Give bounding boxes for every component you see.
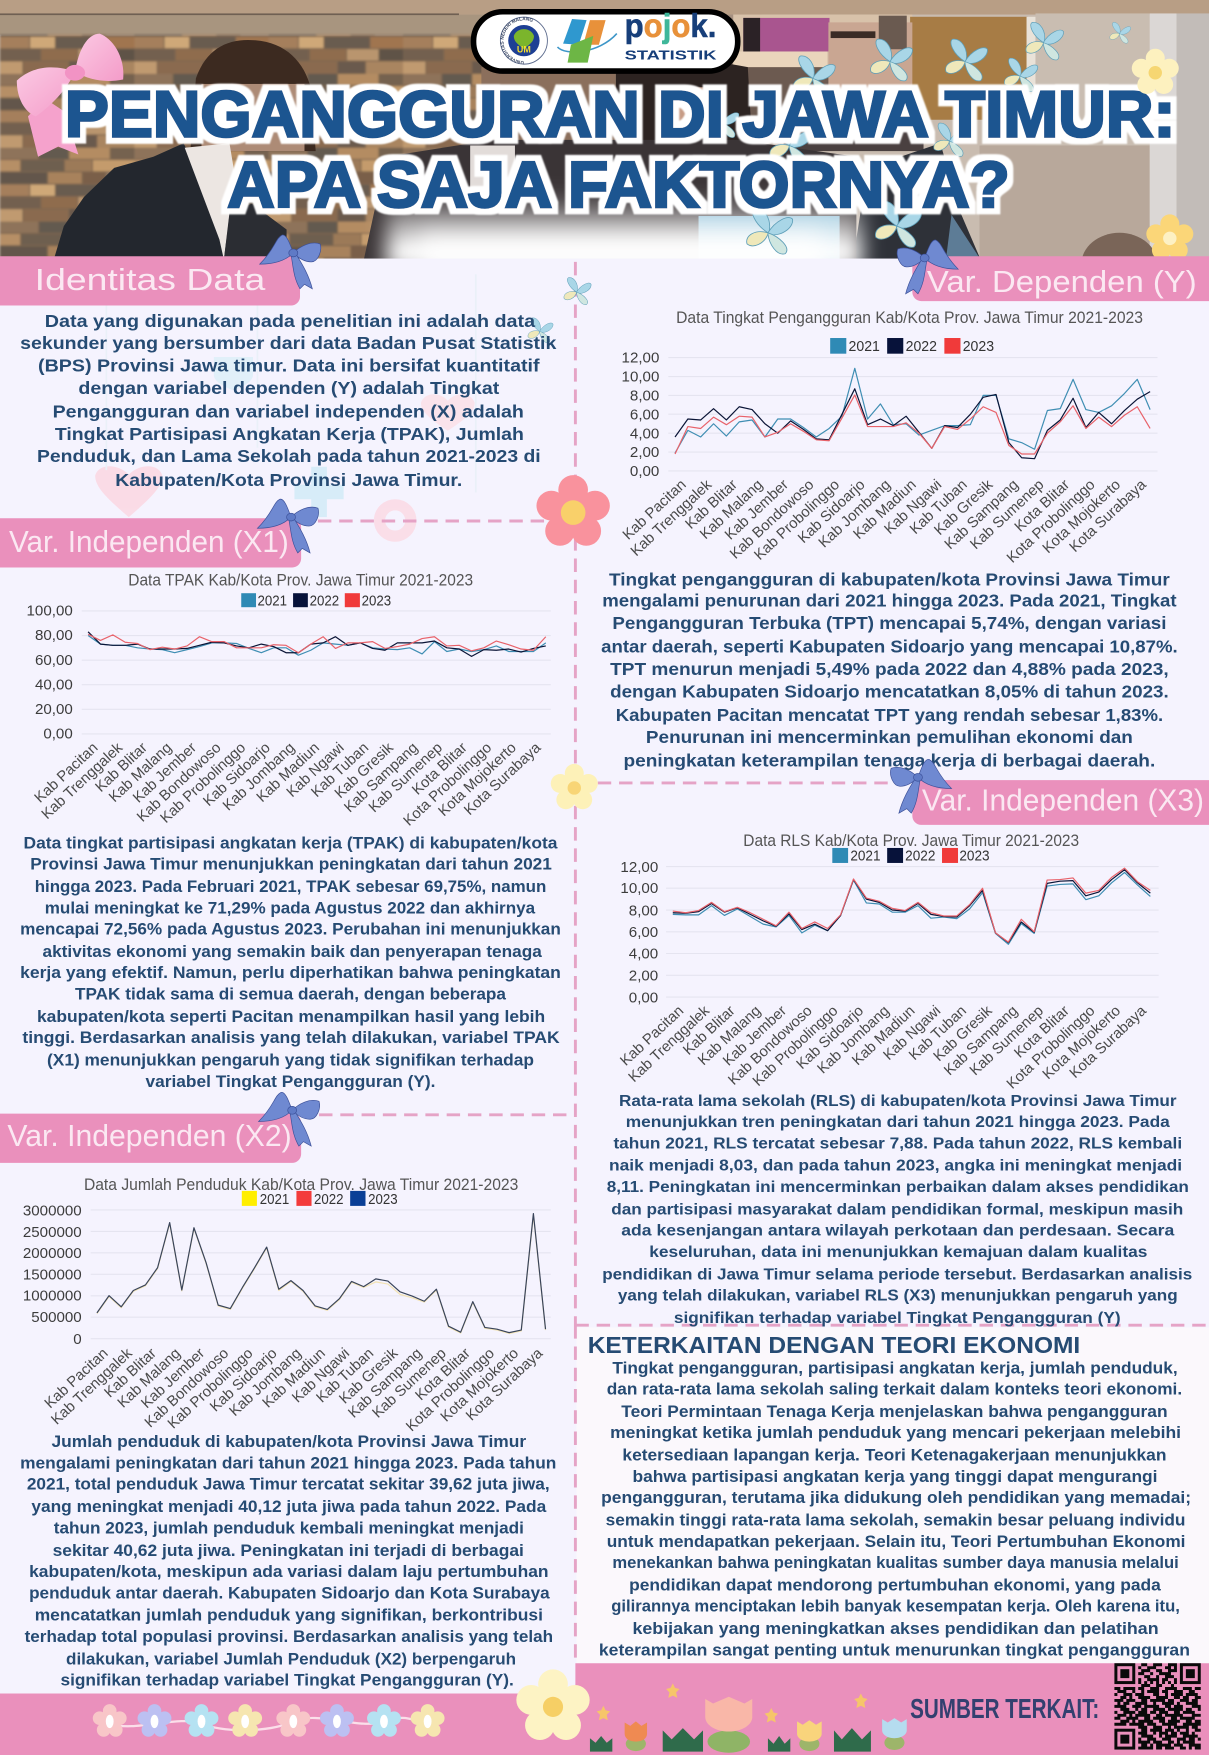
chart: jumlah penduduk: Kab Ngawi [289,1346,353,1406]
chart: TPAK: Kab Jombang [220,740,298,814]
heading: Identitas Data: Identitas Data [35,264,266,297]
icon: blue bow [257,499,319,553]
chart: RLS: 6,00 [629,924,658,941]
chart: jumlah penduduk: Kab Sampang [346,1346,425,1422]
text: pengangguran analysis: TPT menurun menjadi 5,49% pada 2022 dan 4,88% pada 2023, [610,659,1169,679]
legend: 2023 [368,1191,398,1208]
icon: cream flower bottom [516,1669,590,1740]
dashed dividers [318,262,1209,1663]
chart: TPAK: Kab Blitar [93,740,151,796]
text: penduduk analysis: tahun 2023, jumlah penduduk kembali meningkat menjadi [54,1519,524,1537]
panel: keterkaitan dengan teori ekonomi [588,1332,1191,1659]
chart: RLS: Kab Bondowoso [726,1003,816,1089]
chart: RLS: Data RLS Kab/Kota Prov. Jawa Timur 2021-2023 [743,831,1079,850]
chart: RLS: Kab Gresik [931,1003,996,1065]
text: RLS analysis [602,1093,1193,1327]
chart: tingkat pengangguran: 0,00 [630,463,659,480]
chart: jumlah penduduk: Data Jumlah Penduduk Kab/Kota Prov. Jawa Timur 2021-2023 [84,1175,518,1194]
title: PENGANGGURAN DI JAWA TIMUR: [65,78,1175,151]
chart: TPAK: Kab Sidoarjo [201,740,274,810]
chart: TPAK: 100,00 [27,603,73,620]
text: RLS analysis: Rata-rata lama sekolah (RLS) di kabupaten/kota Provinsi Jawa Timur [619,1093,1177,1110]
icon: blue bow [890,759,952,813]
chart: tingkat pengangguran: Kab Sidoarjo [795,477,869,547]
chart: jumlah penduduk: 1500000 [23,1266,82,1283]
chart: tingkat pengangguran: Kab Jombang [816,477,894,551]
chart: RLS: Kab Sampang [941,1003,1021,1079]
text: identitas data [20,311,557,490]
chart: tingkat pengangguran: Kab Probolinggo [752,477,843,564]
panel: Var. Independen X2 heading bar [0,1114,301,1163]
text: penduduk analysis: penduduk antar daerah. Kabupaten Sidoarjo dan Kota Surabaya [29,1584,551,1602]
chart: TPAK: Data TPAK Kab/Kota Prov. Jawa Timur 2021-2023 [128,570,473,589]
chart: TPAK [27,570,551,830]
icon: university seal: UM [517,45,531,55]
body text: Tingkat pengangguran, partisipasi angkatan kerja, jumlah penduduk, [612,1359,1178,1377]
text: TPAK analysis: tinggi. Berdasarkan analisis yang telah dilakukan, variabel TPAK [22,1029,560,1047]
text: RLS analysis: signifikan terhadap variabel Tingkat Pengangguran (Y) [674,1310,1121,1327]
text: penduduk analysis: sekitar 40,62 juta jiwa. Peningkatan ini terjadi di berbagai [53,1542,524,1560]
chart: jumlah penduduk: Kab Jember [139,1345,208,1412]
chart: RLS: Kab Madiun [849,1003,918,1069]
chart: RLS: Kab Sumenep [967,1003,1047,1079]
chart: tingkat pengangguran: Kota Blitar [1012,477,1073,535]
chart: tingkat pengangguran: Kab Pacitan [620,477,690,543]
chart: tingkat pengangguran: Kab Malang [697,477,766,543]
chart: TPAK: Kab Sumenep [366,740,446,816]
chart: RLS: Kota Surabaya [1067,1003,1150,1082]
chart: RLS: Kota Blitar [1012,1003,1073,1062]
chart: tingkat pengangguran: Kota Surabaya [1067,476,1150,556]
logo text: pojok statistik: STATISTIK [625,47,717,62]
legend: 2023 [362,593,391,610]
icon: cream flower [551,764,598,809]
suit right [853,143,981,260]
icon: pink bow [17,34,123,157]
text: TPAK analysis: Provinsi Jawa Timur menunjukkan peningkatan dari tahun 2021 [30,856,552,874]
chart: tingkat pengangguran: 2,00 [630,444,659,461]
chart: jumlah penduduk: Kab Malang [115,1346,184,1411]
title [65,78,1175,221]
chart: RLS: Kab Jombang [815,1003,893,1077]
heading: KETERKAITAN DENGAN TEORI EKONOMI [588,1332,1080,1358]
body text: kebijakan yang meningkatkan akses pendidikan dan pelatihan [632,1620,1159,1638]
chart: RLS: Kab Jember [720,1003,790,1069]
chart: tingkat pengangguran: Kota Probolinggo [1004,477,1099,567]
chart: tingkat pengangguran: 12,00 [622,350,659,367]
chart: TPAK: Kab Jember [130,740,200,806]
text: pengangguran analysis: mengalami penurunan dari 2021 hingga 2023. Pada 2021, Tingkat [602,591,1177,611]
chart: TPAK: Kota Blitar [409,740,471,799]
chart: RLS: 10,00 [620,880,658,897]
icon: blue bow [897,240,958,294]
panel: Var. Independen X3 heading bar [912,780,1209,825]
text: pengangguran analysis: dengan Kabupaten Sidoarjo mencatatkan 8,05% di tahun 2023. [610,681,1169,701]
body text: pengangguran, terutama jika didukung oleh pendidikan yang memadai; [601,1489,1191,1507]
text: penduduk analysis: mencatatkan jumlah penduduk yang signifikan, berkontribusi [35,1607,543,1625]
legend: 2022 [310,593,339,610]
text: RLS analysis: dan partisipasi masyarakat dalam pendidikan formal, meskipun masih [611,1201,1183,1218]
text: pengangguran analysis: Pengangguran Terbuka (TPT) mencapai 5,74%, dengan variasi [612,613,1166,633]
body text: ketersediaan lapangan kerja. Teori Ketenagakerjaan menunjukkan [622,1447,1166,1465]
legend: 2021 [850,848,881,865]
flower garland [93,1704,445,1737]
logo pill [470,8,740,74]
chart: tingkat pengangguran: Kab Ngawi [882,477,945,538]
text: RLS analysis: pendidikan di Jawa Timur selama periode tersebut. Berdasarkan analisis [602,1266,1193,1283]
text: pengangguran analysis: Tingkat pengangguran di kabupaten/kota Provinsi Jawa Timur [609,569,1170,589]
text: pengangguran analysis: peningkatan keterampilan tenaga kerja di berbagai daerah. [624,751,1155,771]
text: pengangguran analysis [601,569,1178,771]
text: penduduk analysis: kabupaten/kota, meskipun ada variasi dalam laju pertumbuhan [29,1563,549,1581]
chart: jumlah penduduk: 2000000 [23,1245,82,1262]
heading: Var. Independen (X2): Var. Independen (X2) [7,1120,292,1153]
chart: jumlah penduduk: 3000000 [23,1203,82,1220]
chart: jumlah penduduk: Kab Probolinggo [165,1346,256,1432]
text: TPAK analysis: TPAK tidak sama di semua daerah, dengan beberapa [75,986,507,1003]
chart: jumlah penduduk: Kota Probolinggo [403,1346,498,1435]
white fade [386,193,862,271]
chart: jumlah penduduk: Kota Blitar [413,1345,474,1404]
chart: tingkat pengangguran: Kab Sumenep [968,477,1047,553]
legend [242,1191,398,1208]
chart: tingkat pengangguran: Kab Gresik [932,477,997,539]
legend: 2023 [959,848,990,865]
legend: 2022 [314,1191,344,1208]
chart: tingkat pengangguran: Kab Sampang [942,477,1022,553]
body text: dan rata-rata lama sekolah saling terkait dalam konteks teori ekonomi. [607,1381,1182,1399]
chart: jumlah penduduk: 500000 [31,1309,82,1326]
chart: TPAK: 0,00 [43,726,73,743]
center persons [616,60,752,146]
title: APA SAJA FAKTORNYA? [227,148,1010,221]
text: identitas data: Pengangguran dan variabel independen (X) adalah [53,401,524,421]
chart: TPAK: 40,00 [35,676,73,693]
text: identitas data: (BPS) Provinsi Jawa timur. Data ini bersifat kuantitatif [38,356,540,376]
legend [830,338,994,355]
chart: jumlah penduduk: 1000000 [23,1288,82,1305]
chart: TPAK: Kab Trenggalek [39,740,126,823]
text: identitas data: dengan variabel dependen (Y) adalah Tingkat [78,378,500,398]
QR code [1114,1665,1201,1748]
chart: tingkat pengangguran: Data Tingkat Pengangguran Kab/Kota Prov. Jawa Timur 2021-2023 [676,308,1143,327]
chart: jumlah penduduk: Kab Gresik [337,1345,402,1407]
body text: pendidikan dapat mendorong pertumbuhan ekonomi, yang pada [629,1576,1162,1594]
man left [190,40,316,151]
text: penduduk analysis [20,1433,556,1690]
icon: university seal: UNIVERSITAS NEGERI MALANG [500,17,533,64]
text: TPAK analysis [20,834,561,1091]
chart: RLS: 4,00 [629,946,658,963]
text: TPAK analysis: variabel Tingkat Pengangguran (Y). [146,1073,435,1091]
man right [828,22,912,125]
body text: keterampilan sangat penting untuk menurunkan tingkat pengangguran [599,1641,1190,1659]
body text: bahwa partisipasi angkatan kerja yang tinggi dapat mengurangi [632,1468,1158,1486]
chart: jumlah penduduk: Kab Jombang [227,1346,305,1420]
sumber terkait label: SUMBER TERKAIT: [910,1693,1099,1724]
body text: meningkat ketika jumlah penduduk yang mencari pekerjaan melebihi [610,1424,1181,1442]
text: RLS analysis: yang telah dilakukan, variabel RLS (X3) menunjukkan pengaruh yang [618,1288,1178,1305]
icon: blue bow [260,235,321,289]
icon: pink flower [536,475,610,546]
text: TPAK analysis: hingga 2023. Pada Februari 2021, TPAK sebesar 69,75%, namun [35,878,546,896]
chart: jumlah penduduk: Kab Sidoarjo [207,1346,281,1415]
text: penduduk analysis: 2021, total penduduk Jawa Timur tercatat sekitar 39,62 juta jiwa, [27,1476,550,1494]
legend: 2023 [963,338,994,355]
text: RLS analysis: keseluruhan, data ini menunjukkan kemajuan dalam kualitas [649,1244,1148,1261]
chart: tingkat pengangguran: Kota Mojokerto [1040,477,1124,557]
chart: tingkat pengangguran: Kab Jember [722,477,792,543]
text: TPAK analysis: kabupaten/kota seperti Pacitan menampilkan hasil yang lebih [37,1008,545,1026]
panel: Var. Independen X1 heading bar [0,518,301,567]
chart: tingkat pengangguran: 10,00 [622,369,659,386]
heading: Var. Dependen (Y): Var. Dependen (Y) [927,266,1197,299]
legend [832,848,990,865]
text: penduduk analysis: mengalami peningkatan dari tahun 2021 hingga 2023. Pada tahun [20,1454,556,1472]
text: identitas data: Data yang digunakan pada penelitian ini adalah data [45,311,535,331]
text: identitas data: sekunder yang bersumber dari data Badan Pusat Statistik [20,333,557,353]
chart: TPAK: Kab Malang [106,740,175,806]
body text: semakin tinggi rata-rata lama sekolah, semakin besar peluang individu [606,1512,1185,1530]
chart: tingkat pengangguran: Kab Bondowoso [727,477,817,563]
heading: Var. Independen (X3): Var. Independen (X3) [922,784,1204,817]
chart: RLS: 12,00 [620,859,658,876]
icon: BPS logo [557,19,617,63]
chart: jumlah penduduk: Kab Tuban [314,1346,377,1406]
chart: RLS: 2,00 [629,967,658,984]
legend: 2021 [257,593,287,610]
chart: TPAK: Kab Bondowoso [134,740,224,826]
chart: jumlah penduduk: Kab Madiun [260,1346,329,1411]
body text [599,1359,1191,1659]
text: identitas data: Penduduk, dan Lama Sekolah pada tahun 2021-2023 di [37,446,541,466]
chart: TPAK: 80,00 [35,627,73,644]
chart: TPAK: Kota Surabaya [461,740,545,819]
legend [241,593,391,610]
chart: RLS: Kota Mojokerto [1040,1003,1124,1083]
text: pengangguran analysis: Penurunan ini mencerminkan pemulihan ekonomi dan [646,727,1133,747]
text: TPAK analysis: kerja yang efektif. Namun, perlu diperhatikan bahwa peningkatan [20,964,561,982]
icon: top right flowers [1132,49,1193,260]
chart: tingkat pengangguran: Kab Trenggalek [628,477,716,560]
panel: Var. Dependen heading bar [912,256,1209,301]
chart: TPAK: Kab Sampang [342,740,421,816]
text: penduduk analysis: dilakukan, variabel Jumlah Penduduk (X2) berpengaruh [66,1650,516,1668]
icon: blue bow [259,1092,320,1146]
header photo [0,0,1209,295]
chart: TPAK: 20,00 [35,701,73,718]
chart: tingkat pengangguran: 4,00 [630,426,659,443]
chart: RLS: Kab Trenggalek [626,1003,713,1086]
text: TPAK analysis: Data tingkat partisipasi angkatan kerja (TPAK) di kabupaten/kota [24,834,559,852]
body text: menekankan bahwa peningkatan kualitas sumber daya manusia melalui [612,1554,1179,1572]
chart: TPAK: Kab Pacitan [32,740,101,806]
chart: jumlah penduduk: Kab Blitar [102,1346,160,1401]
text: TPAK analysis: mulai meningkat ke 71,29% pada Agustus 2022 dan akhirnya [45,899,536,917]
legend: 2021 [849,338,880,355]
chart: tingkat pengangguran [620,308,1158,567]
chart: RLS: Kab Malang [695,1003,764,1069]
chart: tingkat pengangguran: Kab Blitar [683,477,741,533]
chart: RLS: Kab Tuban [906,1003,970,1064]
chart: RLS: Kota Probolinggo [1004,1003,1098,1093]
text: pengangguran analysis: antar daerah, seperti Kabupaten Sidoarjo yang mencapai 10,87%. [601,637,1178,657]
text: RLS analysis: ada kesenjangan antara wilayah perkotaan dan perdesaan. Secara [621,1223,1175,1240]
chart: jumlah penduduk: Kota Mojokerto [438,1346,522,1425]
text: RLS analysis: menunjukkan tren peningkatan dari tahun 2021 hingga 2023. Pada [626,1114,1170,1131]
chart: TPAK: Kota Probolinggo [401,740,495,830]
lower right panel background [577,1327,1209,1663]
body text: gilirannya menciptakan lebih banyak kesempatan kerja. Oleh karena itu, [611,1598,1180,1616]
chart: RLS: Kab Sidoarjo [794,1003,867,1073]
chart: RLS: Kab Pacitan [618,1003,687,1069]
legend: 2022 [906,338,937,355]
chart: tingkat pengangguran: 6,00 [630,407,659,424]
chart: tingkat pengangguran: Kab Madiun [851,477,920,543]
chart: RLS [618,831,1159,1093]
chart: RLS: Kab Probolinggo [750,1003,841,1090]
chart: TPAK: Kab Ngawi [284,740,348,801]
chart: TPAK: Kab Madiun [254,740,323,806]
text: RLS analysis: tahun 2021, RLS tercatat sebesar 7,88. Pada tahun 2022, RLS kembali [613,1135,1182,1152]
chart: jumlah penduduk: Kab Sumenep [370,1346,450,1422]
footer band [0,1663,1209,1755]
heading: Var. Independen (X1): Var. Independen (X1) [9,526,289,559]
body text: untuk mendapatkan pekerjaan. Selain itu, Teori Pertumbuhan Ekonomi [607,1533,1185,1551]
chart: jumlah penduduk: Kab Trenggalek [49,1345,136,1428]
chart: RLS: 8,00 [629,903,658,920]
text: penduduk analysis: yang meningkat menjadi 40,12 juta jiwa pada tahun 2022. Pada [31,1498,547,1516]
chart: RLS: Kab Blitar [680,1003,739,1059]
panel: Identitas Data heading bar [0,256,300,306]
chart: RLS: 0,00 [629,989,658,1006]
chart: TPAK: Kab Gresik [332,740,397,802]
text: penduduk analysis: signifikan terhadap variabel Tingkat Pengangguran (Y). [60,1672,514,1690]
chart: TPAK: 60,00 [35,652,73,669]
legend: 2021 [260,1191,289,1208]
faint medical background icons [95,274,476,536]
chart: TPAK: Kab Tuban [309,740,372,801]
chart: jumlah penduduk: 2500000 [23,1224,82,1241]
chart: jumlah penduduk [23,1175,551,1435]
chart: jumlah penduduk: Kota Surabaya [463,1345,547,1424]
logo text: pojok statistik: pojok. [625,8,716,45]
body text: Teori Permintaan Tenaga Kerja menjelaskan bahwa pengangguran [621,1403,1168,1421]
butterflies [528,22,1131,343]
chart: TPAK: Kab Probolinggo [158,740,249,827]
legend: 2022 [905,848,935,865]
text: TPAK analysis: mencapai 72,56% pada Agustus 2023. Perubahan ini menunjukkan [20,921,561,939]
chart: jumlah penduduk: Kab Pacitan [42,1346,112,1412]
chart: jumlah penduduk: 0 [73,1331,82,1348]
text: TPAK analysis: aktivitas ekonomi yang semakin baik dan penyerapan tenaga [43,943,543,961]
chart: RLS: Kab Ngawi [881,1003,944,1064]
logo text: pojok statistik [625,8,717,62]
tulips and grass illustration [590,1683,907,1753]
chart: tingkat pengangguran: 8,00 [630,388,659,405]
text: RLS analysis: 8,11. Peningkatan ini mencerminkan perbaikan dalam akses pendidikan [607,1179,1189,1196]
text: identitas data: Tingkat Partisipasi Angkatan Kerja (TPAK), Jumlah [55,424,524,444]
text: RLS analysis: naik menjadi 8,03, dan pada tahun 2023, angka ini meningkat menjadi [609,1158,1182,1175]
chart: tingkat pengangguran: Kab Tuban [907,477,971,538]
text: TPAK analysis: (X1) menunjukkan pengaruh yang tidak signifikan terhadap [47,1052,534,1070]
text: pengangguran analysis: Kabupaten Pacitan mencatat TPT yang rendah sebesar 1,83%. [616,705,1163,725]
text: identitas data: Kabupaten/Kota Provinsi Jawa Timur. [115,470,462,490]
text: penduduk analysis: Jumlah penduduk di kabupaten/kota Provinsi Jawa Timur [51,1433,527,1451]
chart: jumlah penduduk: Kab Bondowoso [142,1346,232,1431]
text: penduduk analysis: terhadap total populasi provinsi. Berdasarkan analisis yang telah [25,1628,553,1646]
chart: TPAK: Kota Mojokerto [436,740,520,820]
